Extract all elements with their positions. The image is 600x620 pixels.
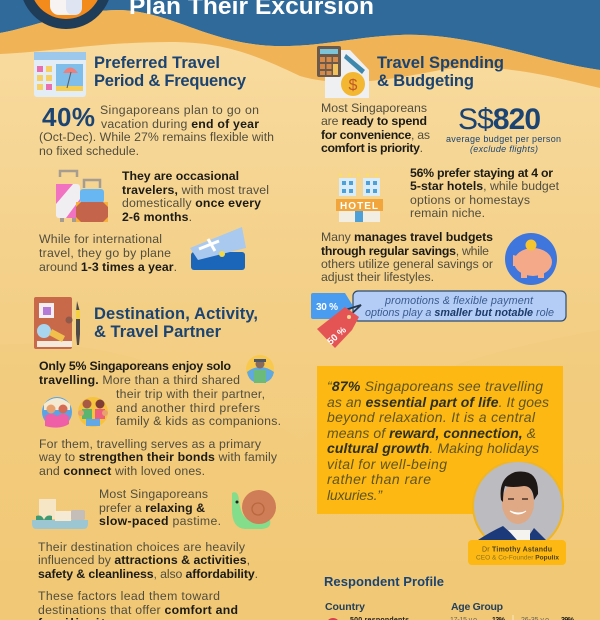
text block: solo travelling: travelling. More than a third shared [39, 373, 240, 387]
panel: destination [32, 297, 281, 620]
header icon [20, 0, 112, 29]
text block: convenience: are ready to spend [321, 114, 427, 128]
heading [94, 54, 247, 90]
text block: slow-paced: prefer a relaxing & [99, 501, 205, 515]
text block: savings: through regular savings, while [321, 244, 489, 258]
country [325, 601, 409, 620]
icon: candles [32, 499, 88, 529]
icon: blue tag: 30 % [316, 302, 338, 313]
age group [450, 601, 575, 620]
text block: strengthen bonds: For them, travelling serves as a primary [39, 437, 262, 451]
country: Country [325, 601, 365, 613]
icon: passport and pen [34, 297, 80, 349]
quote text: means of reward, connection, & [327, 425, 536, 441]
quote text: “87% Singaporeans see travelling [327, 378, 543, 394]
text block: occasional travelers: 2-6 months. [122, 210, 192, 224]
text block: strengthen bonds: way to strengthen their bonds with family [38, 450, 278, 464]
stat: 40%: 40% [42, 102, 95, 132]
icon: piggy bank [505, 233, 557, 285]
text block: solo travelling: family & kids as companions. [116, 414, 281, 428]
text block: slow-paced [99, 487, 221, 528]
text block: occasional travelers: travelers, with most travel [122, 183, 269, 197]
text block: savings [321, 230, 493, 284]
orange dune [0, 10, 600, 88]
icon: hotel: HOTEL [340, 201, 378, 212]
text block: comfort [38, 589, 238, 620]
text block: comfort: destinations that offer comfort and [38, 603, 238, 617]
panel: quote [317, 366, 566, 565]
text block: destination choices: Their destination choices are heavily [38, 540, 246, 554]
heading: Travel Spending [377, 54, 504, 72]
text block: international travel: While for international [39, 232, 162, 246]
stat: average budget [446, 103, 561, 154]
icon: red tag: 50 % [325, 324, 349, 347]
heading [377, 54, 504, 90]
text block: destination choices: safety & cleanliness, also affordability. [38, 567, 258, 581]
callout: promotions: promotions & flexible payment [384, 295, 534, 307]
text block: convenience: comfort is priority. [321, 141, 423, 155]
text block: savings: adjust their lifestyles. [321, 270, 434, 284]
panel: spending [311, 46, 566, 348]
icon: calendar [34, 52, 86, 97]
heading: Period & Frequency [94, 72, 247, 90]
caption: Dr Timothy Astandu [482, 546, 552, 554]
portrait [472, 462, 564, 540]
text block: timing: no fixed schedule. [39, 144, 139, 158]
text block: occasional travelers: domestically once every [122, 196, 261, 210]
panel: respondent profile [324, 574, 575, 620]
callout: promotions: options play a smaller but notable role [365, 307, 554, 319]
text block: savings: others utilize general savings or [321, 257, 493, 271]
caption [468, 540, 566, 565]
text block: hotels: remain niche. [410, 206, 485, 220]
heading: Preferred Travel [94, 54, 220, 72]
text block: strengthen bonds: and connect with loved ones. [39, 464, 205, 478]
quote text: luxuries.” [327, 487, 383, 503]
icon: family [78, 397, 108, 427]
quote box [317, 366, 563, 514]
icon: calculator and invoice: $ [349, 77, 358, 94]
text block: savings: Many manages travel budgets [321, 230, 493, 244]
quote text: rather than rare [327, 471, 431, 487]
age group: Age Group [451, 601, 503, 613]
quote text: beyond relaxation. It is a central [327, 409, 536, 425]
quote text: cultural growth. Making holidays [327, 440, 539, 456]
icon: calculator and invoice [317, 46, 369, 98]
text block: convenience: Most Singaporeans [321, 101, 427, 115]
text block: solo travelling: Only 5% Singaporeans enjoy solo [39, 359, 231, 373]
icon: hotel [336, 175, 383, 222]
text block: strengthen bonds [38, 437, 278, 478]
quote text: as an essential part of life. It goes [327, 394, 549, 410]
panel: travel period [34, 52, 274, 274]
icon: snail [232, 490, 276, 529]
heading: Destination, Activity, [94, 305, 258, 323]
text block: hotels: options or homestays [410, 193, 530, 207]
icon: couple [42, 397, 72, 428]
heading: Respondent Profile [324, 574, 444, 589]
stat: average budget: S$820 [458, 103, 541, 136]
text block: destination choices: influenced by attractions & activities, [38, 553, 250, 567]
text block: timing [39, 103, 274, 158]
lower dune [0, 330, 600, 620]
heading: & Travel Partner [94, 323, 222, 341]
text block: convenience [321, 101, 430, 155]
icon: red tag [317, 305, 361, 348]
stat: average budget: (exclude flights) [470, 144, 538, 154]
quote text: vital for well-being [327, 456, 447, 472]
text block: hotels: 5-star hotels, while budget [410, 179, 560, 193]
text block: slow-paced: slow-paced pastime. [99, 514, 221, 528]
text block: slow-paced: Most Singaporeans [99, 487, 208, 501]
stat: average budget: average budget per person [446, 134, 561, 144]
text block: hotels: 56% prefer staying at 4 or [410, 166, 553, 180]
text block: convenience: for convenience, as [321, 128, 430, 142]
text block: solo travelling: their trip with their partner, [116, 387, 265, 401]
text block: timing: vacation during end of year [101, 117, 259, 131]
icon: suitcases [56, 171, 108, 222]
text block: timing: (Oct-Dec). While 27% remains flexible with [39, 130, 274, 144]
heading [94, 305, 258, 341]
callout: promotions [353, 291, 566, 321]
text block: destination choices [38, 540, 258, 581]
icon: plane ticket [190, 227, 246, 270]
quote text [327, 378, 549, 503]
text block: timing: Singaporeans plan to go on [100, 103, 259, 117]
icon: blue tag [311, 293, 353, 319]
text block: international travel: around 1-3 times a year. [39, 260, 177, 274]
text block: solo travelling [39, 359, 281, 428]
text block: solo travelling: and another third prefers [116, 401, 260, 415]
text block: comfort: These factors lead them toward [38, 589, 220, 603]
text block: hotels [410, 166, 560, 220]
heading: & Budgeting [377, 72, 474, 90]
text block: international travel: travel, they go by plane [39, 246, 171, 260]
text block: occasional travelers [122, 169, 269, 224]
caption: CEO & Co-Founder Populix [476, 554, 559, 562]
icon: solo traveller [246, 355, 274, 383]
text block: international travel [39, 232, 177, 274]
text block: occasional travelers: They are occasional [122, 169, 239, 183]
header band [0, 0, 600, 70]
